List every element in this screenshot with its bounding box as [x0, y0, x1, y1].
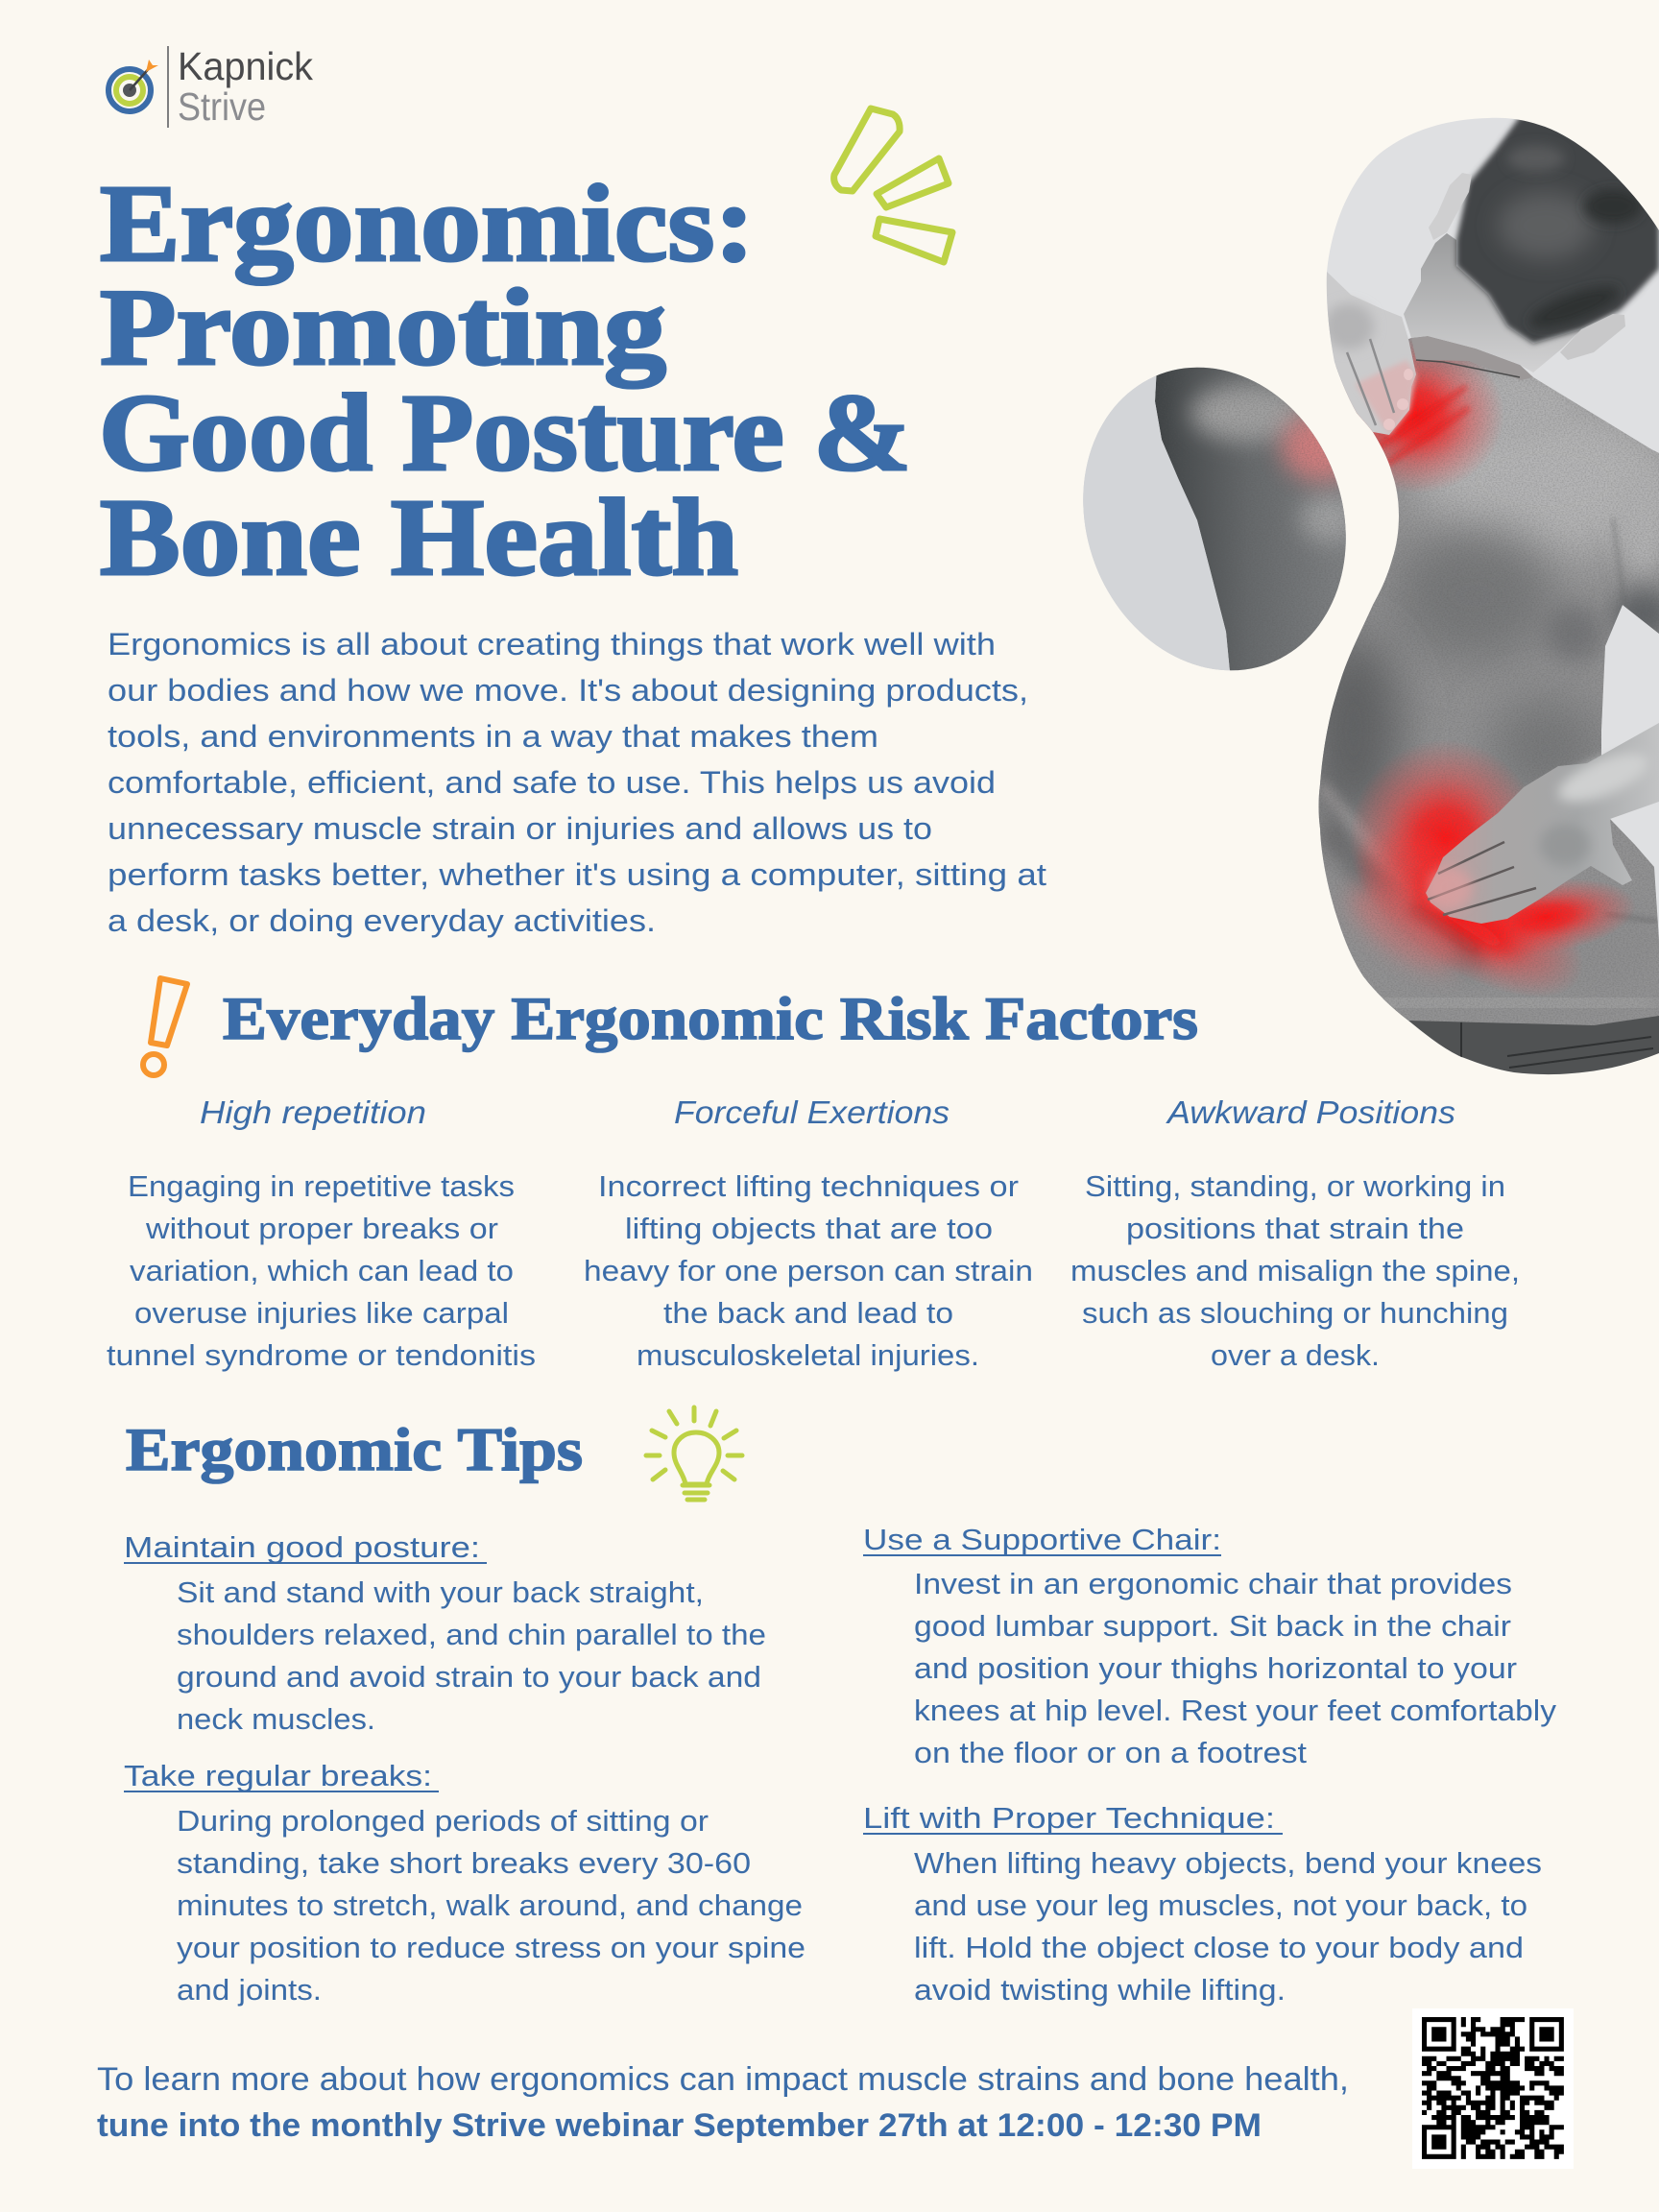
tip: Maintain good posture: Sit and stand with your back straight, [177, 1575, 704, 1609]
tip: Take regular breaks: minutes to stretch, walk around, and change [177, 1888, 803, 1922]
tip: Maintain good posture [124, 1530, 766, 1736]
intro text [108, 627, 1046, 938]
column: Forceful Exertions: lifting objects that are too [625, 1212, 993, 1245]
tip: Maintain good posture: ground and avoid strain to your back and [177, 1660, 761, 1694]
column: Forceful Exertions: the back and lead to [663, 1296, 953, 1330]
tip: Use a Supportive Chair: and position your thighs horizontal to your [914, 1651, 1517, 1685]
tip: Lift with Proper Technique: Lift with Proper Technique: [863, 1801, 1275, 1835]
title: Good Posture & [99, 372, 911, 493]
title: Bone Health [100, 476, 738, 598]
collar [1411, 336, 1533, 380]
shirt [1319, 336, 1659, 1025]
tip: Take regular breaks: Take regular breaks: [124, 1759, 432, 1792]
column: Forceful Exertions: heavy for one person can strain [584, 1254, 1033, 1287]
heading: Ergonomic Tips: Ergonomic Tips [126, 1416, 583, 1483]
column: High repetition: without proper breaks or [145, 1212, 498, 1245]
ears [1429, 173, 1625, 360]
tip: Take regular breaks: your position to reduce stress on your spine [177, 1931, 805, 1964]
tip: Use a Supportive Chair [863, 1523, 1557, 1769]
column: High repetition: tunnel syndrome or tendonitis [107, 1338, 536, 1372]
tip: Maintain good posture: shoulders relaxed, and chin parallel to the [177, 1618, 766, 1651]
red glow: lower back [1346, 747, 1630, 991]
column: High repetition [107, 1094, 536, 1372]
column: High repetition: Engaging in repetitive tasks [128, 1169, 515, 1203]
shirt folds [1320, 784, 1659, 1005]
icon: light bulb [646, 1407, 742, 1500]
column: Awkward Positions: Sitting, standing, or working in [1085, 1169, 1505, 1203]
icon: orange exclamation mark [143, 978, 187, 1075]
title: Promoting [100, 266, 666, 388]
tip: Use a Supportive Chair: on the floor or on a footrest [914, 1736, 1307, 1769]
tip: Lift with Proper Technique: and use your leg muscles, not your back, to [914, 1888, 1527, 1922]
tip: Lift with Proper Technique: When lifting heavy objects, bend your knees [914, 1846, 1542, 1880]
tip: Use a Supportive Chair: knees at hip level. Rest your feet comfortably [914, 1694, 1557, 1727]
photo: man holding neck and lower back in blob [1319, 117, 1659, 1075]
intro text: perform tasks better, whether it's using a computer, sitting at [108, 857, 1046, 892]
tip: Use a Supportive Chair: good lumbar support. Sit back in the chair [914, 1609, 1511, 1643]
background [1327, 117, 1659, 938]
logo: Kapnick Strive: Kapnick [178, 44, 313, 88]
column: Awkward Positions: Awkward Positions [1166, 1094, 1455, 1130]
logo: Kapnick Strive: Strive [178, 84, 266, 129]
icon: target with arrow [108, 60, 158, 111]
call to action text [97, 2061, 1349, 2144]
red glow: neck [1351, 342, 1498, 488]
column: Awkward Positions: muscles and misalign the spine, [1070, 1254, 1520, 1287]
tip: Take regular breaks: standing, take short breaks every 30-60 [177, 1846, 751, 1880]
column: Forceful Exertions [584, 1094, 1033, 1372]
pants [1382, 998, 1659, 1075]
heading: Everyday Ergonomic Risk Factors: Everyday Ergonomic Risk Factors [223, 985, 1198, 1052]
call to action text: tune into the monthly Strive webinar September 27th at 12:00 - 12:30 PM [97, 2107, 1262, 2144]
column: Awkward Positions: such as slouching or hunching [1082, 1296, 1508, 1330]
tip: Take regular breaks: and joints. [177, 1973, 322, 2007]
intro text: Ergonomics is all about creating things that work well with [108, 627, 996, 661]
call to action text: To learn more about how ergonomics can impact muscle strains and bone health, [97, 2061, 1349, 2098]
tip: Lift with Proper Technique: avoid twisting while lifting. [914, 1973, 1286, 2007]
tip: Take regular breaks: During prolonged periods of sitting or [177, 1804, 709, 1838]
tip: Use a Supportive Chair: Invest in an ergonomic chair that provides [914, 1567, 1512, 1600]
column: Awkward Positions [1070, 1094, 1520, 1372]
tip: Lift with Proper Technique [863, 1801, 1542, 2007]
tip: Maintain good posture: neck muscles. [177, 1702, 375, 1736]
column: Awkward Positions: over a desk. [1211, 1338, 1380, 1372]
intro text: unnecessary muscle strain or injuries and allows us to [108, 811, 932, 846]
tip: Maintain good posture: Maintain good posture: [124, 1530, 480, 1564]
column: High repetition: variation, which can lead to [130, 1254, 514, 1287]
title: Ergonomics: [100, 162, 755, 284]
QR code [1412, 2008, 1574, 2169]
logo: Kapnick Strive [108, 44, 313, 129]
tip: Use a Supportive Chair: Use a Supportive Chair: [863, 1523, 1221, 1556]
icon: lime burst marks [834, 108, 952, 262]
column: High repetition: High repetition [200, 1094, 426, 1130]
intro text: a desk, or doing everyday activities. [108, 903, 656, 938]
column: Forceful Exertions: Incorrect lifting techniques or [598, 1169, 1019, 1203]
tip: Lift with Proper Technique: lift. Hold the object close to your body and [914, 1931, 1524, 1964]
column: High repetition: overuse injuries like carpal [134, 1296, 509, 1330]
title [99, 162, 911, 598]
neck [1404, 233, 1581, 373]
column: Forceful Exertions: musculoskeletal injuries. [637, 1338, 979, 1372]
column: Awkward Positions: positions that strain the [1126, 1212, 1464, 1245]
intro text: tools, and environments in a way that makes them [108, 719, 878, 754]
column: Forceful Exertions: Forceful Exertions [674, 1094, 950, 1130]
lower forearm and hand [1426, 723, 1659, 924]
intro text: our bodies and how we move. It's about designing products, [108, 673, 1028, 708]
intro text: comfortable, efficient, and safe to use. This helps us avoid [108, 765, 996, 800]
hair [1456, 108, 1659, 344]
tip: Take regular breaks [124, 1759, 805, 2007]
upper hand [1315, 272, 1416, 435]
photo: arm close-up in oval [1083, 367, 1346, 670]
